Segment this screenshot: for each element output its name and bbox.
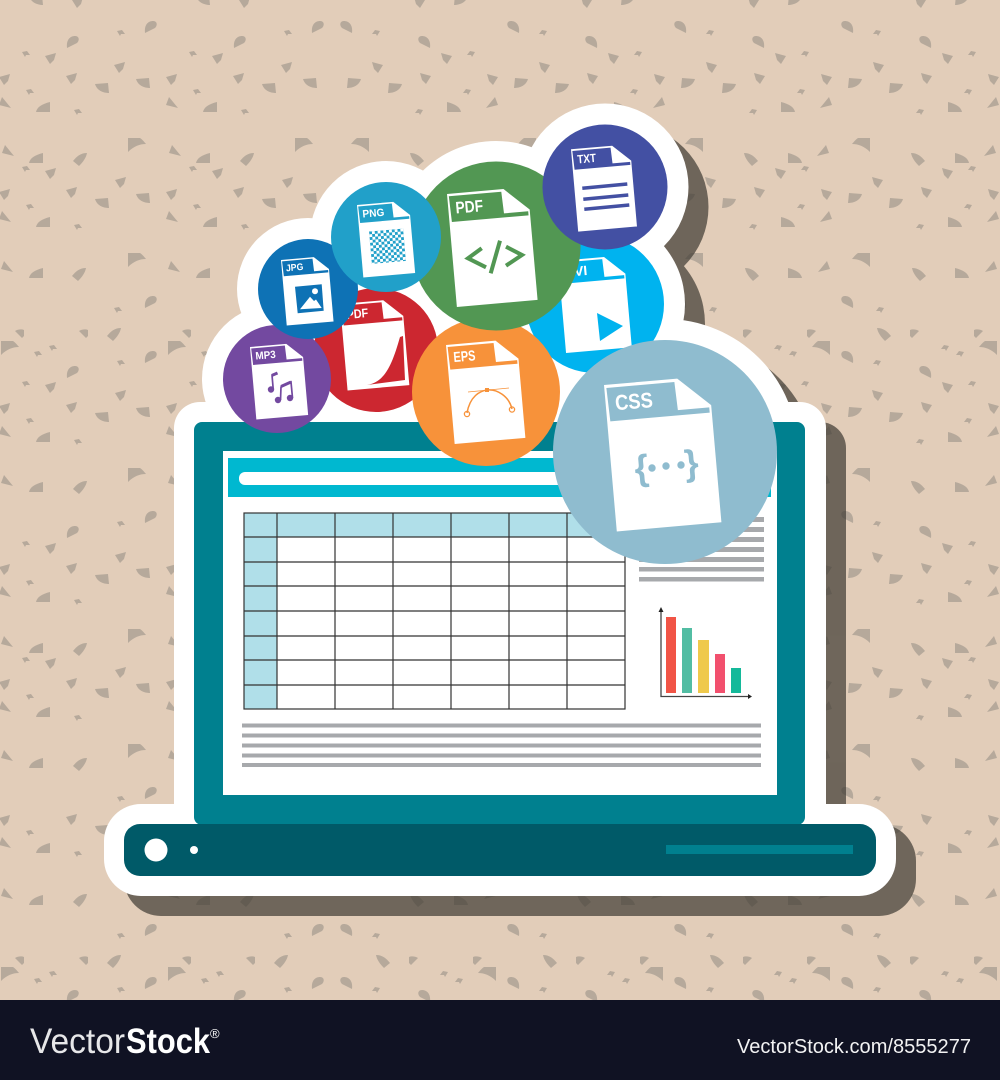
- circle: CSS: {: [633, 446, 650, 489]
- laptop base: [124, 824, 876, 876]
- white sticker outline: [104, 104, 896, 896]
- circle: JPG: JPG: [286, 262, 304, 274]
- screen bezel: [194, 422, 805, 825]
- circle: PDF image: PDF: [346, 305, 369, 322]
- circle: AVI: AVI: [564, 263, 588, 280]
- circle: MP3: [223, 325, 331, 433]
- text lines under table: [242, 724, 761, 767]
- screen page: [223, 451, 777, 795]
- toolbar: [228, 458, 771, 497]
- footer logo: Stock: [126, 1022, 210, 1061]
- footer url: VectorStock.com/8555277: [737, 1036, 971, 1058]
- circle: TXT: [542, 124, 668, 250]
- circle: PNG: [331, 182, 441, 292]
- laptop: [124, 422, 876, 876]
- text lines right of table: [639, 517, 764, 582]
- circle: EPS: EPS: [453, 348, 476, 366]
- circle: PNG: PNG: [362, 207, 385, 221]
- footer logo: Vector: [30, 1022, 125, 1061]
- footer logo: [30, 1022, 220, 1061]
- circle: CSS: [553, 340, 777, 564]
- footer band: [0, 1000, 1000, 1080]
- circle: AVI: [526, 235, 664, 373]
- spreadsheet table: [244, 513, 625, 709]
- circle: TXT: TXT: [577, 151, 597, 167]
- circle: PDF image: [314, 288, 438, 412]
- circle: JPG: [258, 239, 358, 339]
- circle: PDF code: [412, 162, 580, 330]
- circle: CSS: }: [683, 441, 700, 484]
- circle: EPS: [412, 318, 560, 466]
- circle: CSS: CSS: [614, 388, 654, 415]
- bar chart: [658, 607, 752, 699]
- sticker drop shadow: [124, 124, 916, 916]
- footer logo: ®: [210, 1026, 220, 1041]
- circle: MP3: MP3: [255, 349, 276, 363]
- circle: PDF code: PDF: [455, 196, 484, 218]
